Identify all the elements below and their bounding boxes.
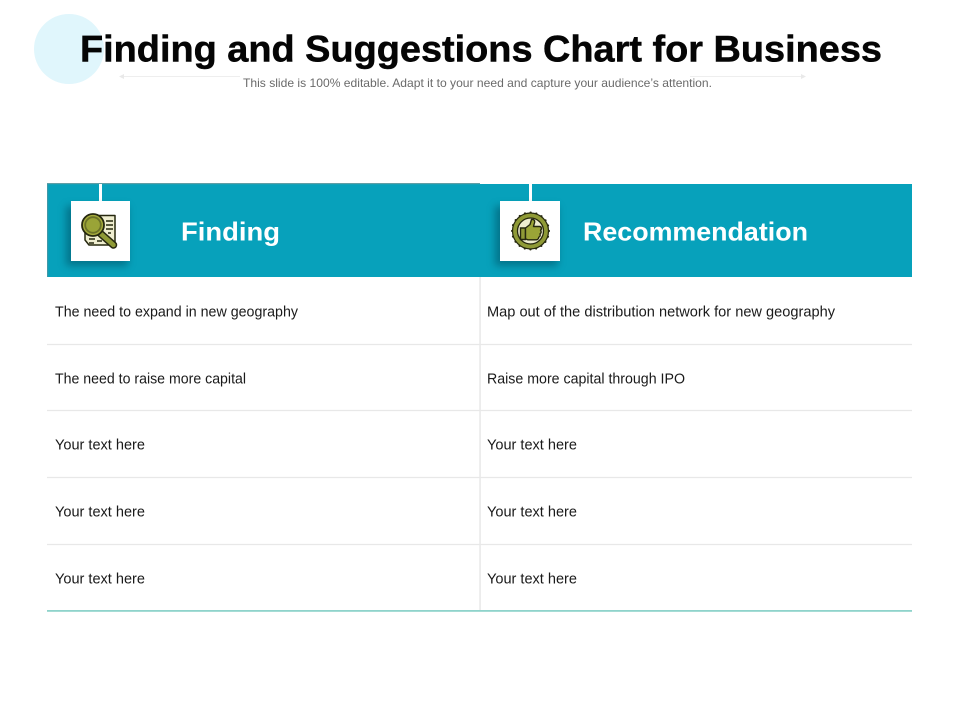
heading text: Recommendation: [583, 216, 808, 246]
row and column dividers: [47, 277, 912, 612]
table: [47, 183, 912, 612]
heading text: Finding: [181, 216, 280, 246]
row 5: Your text here: [55, 572, 145, 588]
row 3: [55, 438, 577, 454]
row 2: [55, 372, 685, 388]
column heading: Finding: [66, 184, 280, 266]
row 1: Map out of the distribution network for new geography: [487, 305, 836, 321]
row 4: Your text here: [487, 505, 577, 521]
connector: recommendation: [529, 184, 532, 202]
row 1: [55, 305, 836, 321]
row 1: The need to expand in new geography: [55, 305, 299, 321]
connector: finding: [99, 184, 102, 202]
row 4: Your text here: [55, 505, 145, 521]
row 4: [55, 505, 577, 521]
column heading: Recommendation: [495, 184, 808, 266]
decorative circle: [34, 14, 104, 84]
icon: thumbs-up badge: [495, 201, 560, 266]
title: Finding and Suggestions Chart for Business: [80, 28, 882, 70]
row 3: Your text here: [55, 438, 145, 454]
subtitle: This slide is 100% editable. Adapt it to your need and capture your audience’s attention.: [243, 76, 712, 90]
icon: magnifier over document: [66, 201, 130, 266]
row 3: Your text here: [487, 438, 577, 454]
row 5: [55, 572, 577, 588]
row 2: Raise more capital through IPO: [487, 372, 685, 388]
row 2: The need to raise more capital: [55, 372, 246, 388]
double-headed arrow under title: [119, 74, 806, 79]
row 5: Your text here: [487, 572, 577, 588]
table header band: [47, 183, 912, 277]
